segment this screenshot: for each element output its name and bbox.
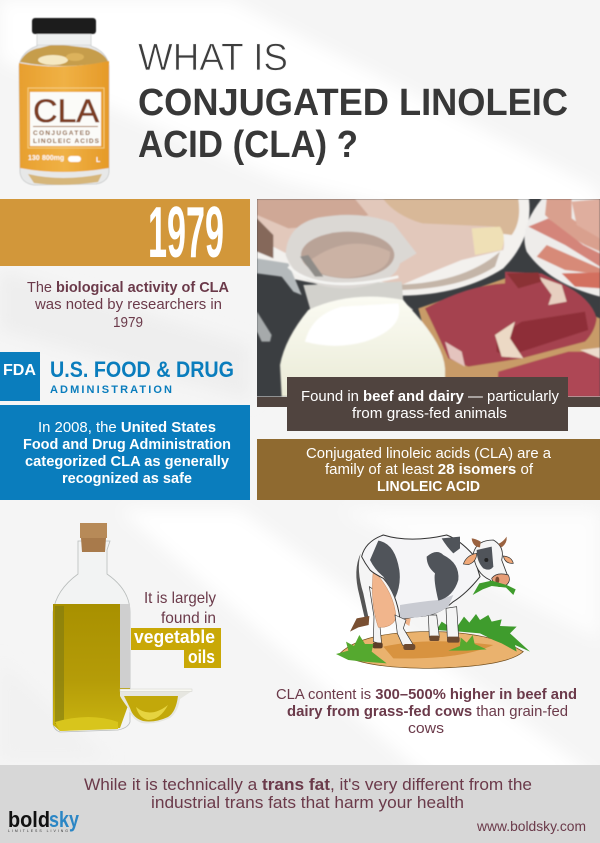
ham plate (524, 199, 600, 297)
website url: www.boldsky.com (476, 818, 586, 834)
text block: cla content (276, 686, 577, 737)
title line: conjugated linoleic: CONJUGATED LINOLEIC (138, 82, 568, 124)
ears and horns (463, 553, 477, 565)
icon: CLA supplement bottle: LINOLEIC ACIDS (33, 138, 100, 145)
far legs (428, 615, 439, 637)
ground patch (340, 632, 523, 668)
icon: olive oil bottle and bowl (53, 523, 192, 732)
callout: beef and dairy: from grass-fed animals (352, 405, 507, 422)
title line: what is: WHAT IS (138, 37, 288, 79)
panel: isomers: family of at least 28 isomers of (325, 461, 534, 478)
FDA logo: U.S. FOOD & DRUG (50, 357, 234, 382)
panel: 1979 year banner (0, 193, 250, 273)
footer statement: While it is technically a trans fat, it's very different from the (84, 775, 532, 794)
text block: cla content: CLA content is 300–500% higher in beef and (276, 686, 577, 703)
milk body (280, 297, 445, 397)
text block: cla content: dairy from grass-fed cows than grain-fed (287, 703, 568, 720)
body (362, 535, 480, 619)
text block: biological activity: was noted by researchers in (34, 296, 222, 313)
footer statement: industrial trans fats that harm your health (151, 793, 464, 812)
red steak (425, 272, 597, 367)
text block: biological activity: 1979 (113, 314, 143, 331)
callout: beef and dairy: Found in beef and dairy — particularly (301, 388, 559, 405)
panel: FDA recognition: In 2008, the United States (38, 419, 216, 436)
udder (372, 570, 396, 627)
icon: CLA supplement bottle: CLA (33, 93, 100, 129)
panel: 1979 year banner: 1979 (148, 193, 224, 273)
far grass (437, 614, 530, 652)
text block: biological activity: The biological activity of CLA (27, 279, 229, 296)
panel: FDA recognition: categorized CLA as generally (25, 453, 230, 470)
icon: CLA supplement bottle: 800mg (42, 155, 64, 162)
boldsky logo (8, 807, 80, 833)
callout: beef and dairy (287, 377, 568, 431)
panel: FDA recognition: recognized as safe (62, 470, 192, 487)
text block: cla content: cows (408, 720, 444, 737)
glass handle (257, 258, 302, 295)
FDA logo: ADMINISTRATION (50, 384, 172, 396)
belly shade (400, 595, 453, 619)
photo: milk jug, chicken and red meat (257, 199, 600, 397)
boldsky logo: LIMITLESS LIVING (8, 829, 68, 833)
text block: vegetable oils: found in (161, 610, 216, 627)
boldsky logo: bold (8, 807, 50, 832)
text block: biological activity (27, 279, 229, 331)
footer statement (84, 775, 532, 812)
jug rim (286, 215, 417, 288)
bowl with chicken (257, 199, 530, 296)
head (473, 540, 509, 587)
black patches (370, 541, 400, 598)
FDA logo: FDA (3, 362, 36, 379)
title (138, 37, 568, 166)
jug neck glass (302, 282, 414, 311)
dark strip below photo (257, 397, 600, 407)
text block: vegetable oils (131, 590, 221, 668)
panel: isomers: Conjugated linoleic acids (CLA) are a (306, 445, 552, 462)
boldsky logo: sky (49, 807, 80, 832)
icon: grazing cow (336, 535, 530, 668)
panel: isomers (257, 439, 600, 500)
second steak (497, 352, 600, 397)
icon: CLA supplement bottle: 130 (28, 155, 40, 162)
panel: isomers: LINOLEIC ACID (377, 478, 480, 495)
icon: CLA supplement bottle: CONJUGATED (33, 130, 90, 137)
text block: vegetable oils: vegetable (134, 627, 215, 647)
hind leg near (395, 615, 414, 646)
panel: FDA recognition: Food and Drug Administration (23, 436, 231, 453)
title line: acid (cla): ACID (CLA) ? (138, 124, 358, 166)
text block: vegetable oils: It is largely (144, 590, 216, 607)
panel: FDA recognition (0, 405, 250, 500)
front grass tufts (336, 635, 387, 663)
FDA logo (0, 352, 234, 401)
text block: vegetable oils: oils (188, 647, 215, 667)
grass in mouth (473, 581, 516, 595)
wooden board (418, 278, 600, 397)
icon: CLA supplement bottle: L (96, 157, 101, 164)
footer band (0, 765, 600, 843)
tail (356, 553, 369, 619)
hind leg far (369, 587, 382, 644)
icon: CLA supplement bottle (19, 18, 109, 185)
